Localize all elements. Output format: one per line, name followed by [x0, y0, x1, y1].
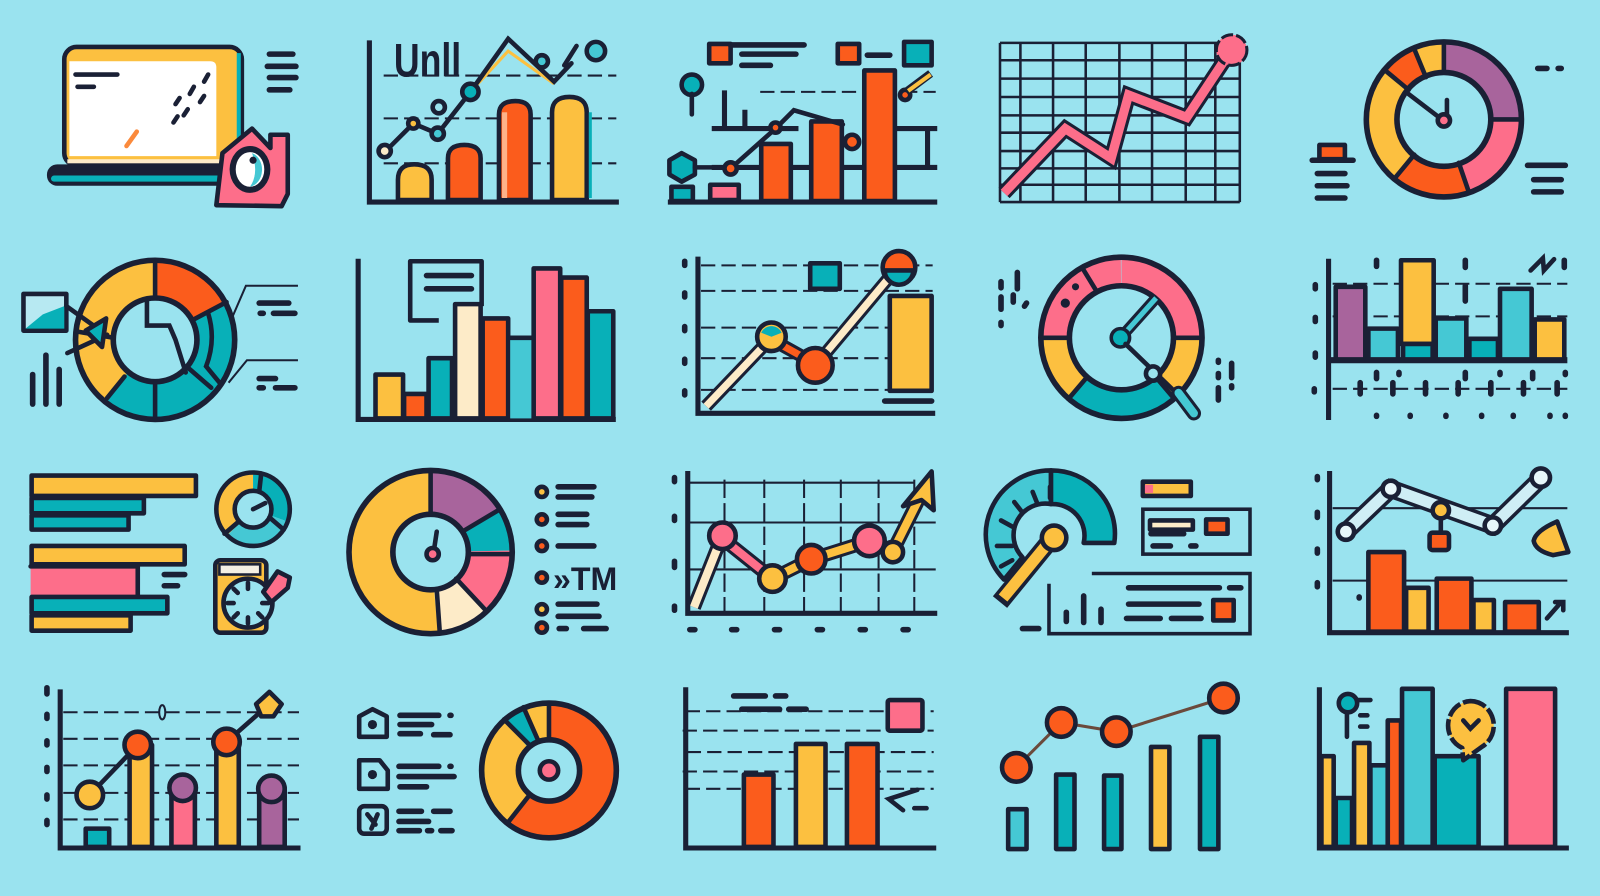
panel: line chart with large nodes [685, 251, 933, 413]
columns [744, 744, 878, 847]
arrow [66, 306, 107, 353]
yellow bar [890, 296, 932, 391]
ring chart [1041, 257, 1202, 418]
bars [1321, 689, 1555, 847]
legend [537, 487, 617, 633]
donut chart [76, 260, 235, 419]
pin icon [1339, 694, 1370, 737]
panel: bars with trend and markers [669, 42, 936, 202]
icon: laptop [47, 47, 242, 186]
bars [398, 97, 592, 200]
chain line [1338, 468, 1550, 550]
donut chart [1366, 42, 1521, 197]
panel: line chart with rising arrow [674, 471, 936, 630]
axis dots [44, 688, 50, 825]
semi gauge [986, 470, 1115, 580]
panel: ring gauge with magnifier [1001, 257, 1232, 418]
dashed upper line [760, 91, 936, 93]
panel: column chart with lollipops [47, 688, 299, 848]
bars [671, 70, 895, 201]
orange tag and lines [1312, 145, 1353, 198]
panel: line chart on grid [1000, 35, 1247, 202]
label: Unll: Unll [394, 35, 461, 87]
panel: rounded bar chart with line [369, 35, 616, 202]
text lines: laptop legend [267, 54, 296, 90]
axis dots [674, 478, 908, 630]
panel: donut with callouts [23, 260, 298, 419]
chart thumbnail [23, 294, 66, 331]
axis dots [682, 261, 687, 395]
panel: bar chart with scale dots [1314, 258, 1567, 417]
columns [86, 742, 285, 847]
bars [1368, 552, 1539, 632]
yellow tag [1143, 482, 1191, 496]
donut chart [349, 470, 512, 634]
baseline [1329, 357, 1567, 363]
axes and grid [670, 93, 935, 202]
text lines [164, 575, 185, 586]
axes [60, 692, 298, 848]
axes [358, 261, 613, 419]
speech bubble with heart [1448, 701, 1494, 760]
connecting line [1016, 698, 1223, 767]
icon: tape measure [216, 129, 288, 206]
panel: link chain chart with bars [1317, 468, 1568, 633]
mini bars [33, 355, 59, 404]
grid lines [701, 265, 933, 390]
legend icons [359, 709, 388, 834]
axes [686, 690, 934, 848]
nodes [1002, 684, 1238, 782]
panel: laptop with tape measure icon [47, 47, 296, 206]
legend lines [399, 715, 454, 831]
base line [885, 398, 932, 404]
teal square [810, 263, 840, 289]
panel: dense bars with heart bubble [1319, 689, 1566, 848]
panel: semi gauge with pen and boxes [986, 470, 1250, 634]
note box [410, 261, 482, 320]
grid lines [683, 711, 934, 789]
panel: horizontal bars with small gauges [31, 472, 290, 633]
pink square [888, 700, 922, 731]
tick marks [1001, 272, 1232, 400]
callouts [229, 286, 298, 383]
panel: line over thin columns [1002, 684, 1238, 849]
line series [379, 39, 605, 157]
row of dots [1377, 415, 1565, 416]
trend lines and markers [77, 692, 285, 808]
panel: donut chart with legend [349, 470, 617, 634]
thin columns [1008, 737, 1218, 849]
small donut [216, 472, 290, 546]
trend line [724, 74, 931, 175]
panel: legend with orange donut [359, 703, 616, 838]
header lines [734, 696, 806, 709]
line series [694, 471, 934, 607]
grid [1000, 43, 1240, 202]
grid lines [384, 76, 616, 163]
panel: column chart with notes [683, 690, 934, 848]
panel: donut gauge with purple segment [1312, 42, 1565, 198]
text lines [259, 303, 295, 388]
legend: »TM [553, 560, 617, 597]
panel: multicolor bar chart with note [358, 261, 613, 419]
thick line series [706, 251, 915, 406]
axis dots [1317, 477, 1359, 598]
needle and magnifier [1111, 298, 1194, 413]
arrow note [889, 790, 927, 810]
grid lines [1333, 508, 1567, 581]
horizontal bars group one [32, 476, 196, 530]
grid [690, 483, 936, 569]
donut chart [482, 703, 616, 838]
horizontal bars group two [31, 546, 185, 631]
axis [1326, 261, 1331, 417]
lower box [1022, 574, 1250, 634]
upper box [1143, 509, 1250, 554]
grid lines [63, 712, 299, 819]
axes [688, 474, 935, 613]
axes [1319, 690, 1566, 848]
bars [376, 268, 613, 418]
pink line series [1004, 35, 1247, 193]
grid lines [1333, 284, 1567, 389]
pen [1000, 526, 1066, 602]
axes [698, 259, 933, 413]
axes [1330, 474, 1566, 633]
bars [1336, 260, 1564, 360]
icon: zigzag [1531, 258, 1554, 270]
pin and hexagon markers [669, 75, 935, 182]
scale ticks and dots [1314, 260, 1565, 394]
legend squares and lines [709, 42, 932, 65]
icon: yellow tag [1534, 521, 1568, 555]
dashed verticals [724, 480, 914, 612]
right text lines [1528, 68, 1565, 192]
stopwatch icon [215, 560, 290, 633]
axes [369, 43, 616, 202]
icon: small arrow [1547, 602, 1563, 618]
